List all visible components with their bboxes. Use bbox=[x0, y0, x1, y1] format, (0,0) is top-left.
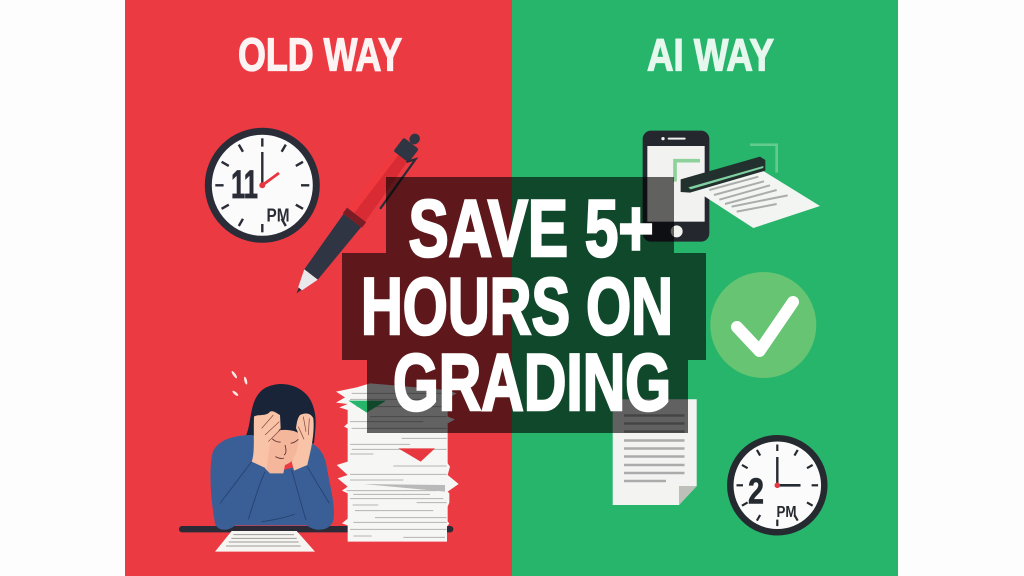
red tab bbox=[398, 448, 435, 462]
icon: clock 11 PM bbox=[208, 131, 316, 239]
shadow wedge bbox=[363, 484, 445, 492]
headline line 3: GRADING bbox=[393, 338, 671, 428]
outer bracket bbox=[750, 145, 777, 173]
icon: phone scanner bbox=[643, 131, 820, 242]
icon: clock 11 PM: 11 bbox=[231, 163, 258, 207]
icon: graded document bbox=[613, 399, 697, 505]
sweater bbox=[211, 435, 334, 530]
hair bbox=[245, 384, 316, 443]
headline line 2: HOURS ON bbox=[361, 262, 673, 352]
stress marks bbox=[231, 370, 248, 397]
stack lines bbox=[347, 393, 447, 537]
icon: red pen bbox=[287, 127, 430, 303]
home button bbox=[671, 225, 683, 237]
green check tab bbox=[348, 401, 386, 413]
right hand bbox=[292, 414, 314, 471]
sweater folds bbox=[220, 462, 329, 522]
headline bbox=[361, 184, 673, 428]
closed eyes and mouth bbox=[272, 439, 298, 458]
icon: clock 2 PM bbox=[730, 438, 824, 532]
scanned paper bbox=[691, 170, 820, 228]
icon: checkmark badge bbox=[710, 272, 816, 378]
panel: AI way green background bbox=[512, 0, 898, 576]
heading: old way: OLD WAY bbox=[238, 28, 402, 80]
phone screen bbox=[647, 146, 705, 222]
heading: AI way: AI WAY bbox=[647, 30, 774, 80]
icon: clock 2 PM: PM bbox=[776, 504, 796, 521]
banner: translucent backdrop bbox=[342, 177, 706, 433]
right fingers bbox=[298, 417, 309, 439]
face bbox=[265, 430, 301, 473]
paper on desk bbox=[215, 531, 315, 552]
panel: old way red background bbox=[125, 0, 512, 576]
icon: clock 11 PM: PM bbox=[266, 206, 290, 226]
phone body bbox=[643, 131, 709, 242]
icon: clock 2 PM: 2 bbox=[748, 470, 764, 512]
left hand bbox=[252, 411, 281, 469]
headline line 1: SAVE 5+ bbox=[408, 184, 654, 274]
inner bracket bbox=[675, 161, 700, 182]
left fingers bbox=[262, 415, 281, 442]
paper stack bbox=[336, 383, 459, 542]
desk bbox=[179, 526, 453, 532]
illustration: stressed person at desk bbox=[179, 370, 459, 552]
scanner bar bbox=[681, 157, 765, 193]
